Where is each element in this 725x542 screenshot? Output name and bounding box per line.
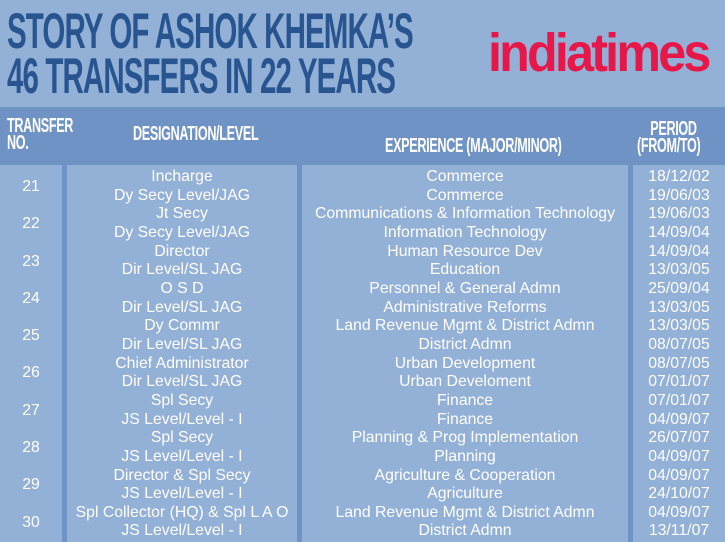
column: experience: Land Revenue Mgmt & District Admn xyxy=(335,504,594,521)
column: experience: Agriculture & Cooperation xyxy=(375,466,555,484)
column: experience: Planning xyxy=(434,448,496,465)
column: period: 25/09/04 xyxy=(648,280,710,297)
column: period: 04/09/07 xyxy=(648,411,710,428)
column: designation: Dy Secy Level/JAG xyxy=(114,224,250,241)
column: experience: Communications & Information Technology xyxy=(315,205,615,222)
column: period: 08/07/05 xyxy=(648,355,710,372)
header: period xyxy=(637,118,700,157)
column: designation: Dir Level/SL JAG xyxy=(122,299,242,316)
column: transfer numbers: 24 xyxy=(22,290,40,307)
column: experience: District Admn xyxy=(418,522,512,539)
column: transfer numbers: 21 xyxy=(22,178,40,195)
column: period: 19/06/03 xyxy=(648,187,710,204)
header: transfer no xyxy=(7,115,73,154)
title: 46 TRANSFERS IN 22 YEARS xyxy=(7,48,395,104)
logo: indiatimes: indiatimes xyxy=(488,23,708,83)
column: experience: Urban Develoment xyxy=(399,373,531,390)
column: period: 07/01/07 xyxy=(648,392,710,409)
column: designation: Dy Commr xyxy=(144,317,220,334)
column: period: 13/03/05 xyxy=(648,317,710,334)
column: experience: Urban Development xyxy=(395,355,535,372)
header: period: PERIOD xyxy=(650,118,697,140)
column: transfer numbers: 25 xyxy=(22,327,40,344)
column: period: 18/12/02 xyxy=(648,168,710,185)
column: period: 04/09/07 xyxy=(648,504,710,521)
column: transfer numbers: 28 xyxy=(22,439,40,456)
column: designation: JS Level/Level - I xyxy=(121,448,243,465)
column: designation: Chief Administrator xyxy=(115,355,249,372)
column: experience: Land Revenue Mgmt & District Admn xyxy=(335,317,594,334)
column: experience: Education xyxy=(430,261,500,278)
column: transfer numbers: 22 xyxy=(22,215,40,232)
column: experience: District Admn xyxy=(418,336,512,353)
column: period: 24/10/07 xyxy=(648,485,710,502)
column: transfer numbers: 30 xyxy=(22,514,40,531)
column: designation: Director xyxy=(154,243,210,260)
column: period xyxy=(648,168,710,539)
column: period: 19/06/03 xyxy=(648,205,710,222)
column: transfer numbers: 23 xyxy=(22,253,40,270)
column: period: 13/03/05 xyxy=(648,261,710,278)
header: experience: EXPERIENCE (MAJOR/MINOR) xyxy=(385,135,562,157)
column: experience: Planning & Prog Implementation xyxy=(352,429,578,446)
column: transfer numbers xyxy=(22,178,40,531)
column: period: 07/01/07 xyxy=(648,373,710,390)
column: designation: Dir Level/SL JAG xyxy=(122,336,242,353)
header: transfer no: TRANSFER xyxy=(7,115,73,137)
column: designation: JS Level/Level - I xyxy=(121,485,243,502)
column: transfer numbers: 29 xyxy=(22,476,40,493)
column: experience: Human Resource Dev xyxy=(387,243,543,260)
column: designation: Spl Collector (HQ) & Spl L A O xyxy=(76,504,288,521)
column: designation: JS Level/Level - I xyxy=(121,522,243,539)
column: designation: Spl Secy xyxy=(151,429,213,446)
column: period: 14/09/04 xyxy=(648,224,710,241)
column: experience: Finance xyxy=(437,392,493,409)
column: experience: Personnel & General Admn xyxy=(369,280,561,297)
column: designation: Dy Secy Level/JAG xyxy=(114,187,250,204)
column: period: 04/09/07 xyxy=(648,448,710,465)
column: designation: Director & Spl Secy xyxy=(114,466,250,484)
column: period: 13/03/05 xyxy=(648,299,710,316)
column: experience: Agriculture xyxy=(427,485,503,502)
column: period: 14/09/04 xyxy=(648,243,710,260)
column: designation: Dir Level/SL JAG xyxy=(122,261,242,278)
header: period: (FROM/TO) xyxy=(637,135,700,157)
column: transfer numbers: 27 xyxy=(22,402,40,419)
column: experience: Commerce xyxy=(426,187,504,204)
title: STORY OF ASHOK KHEMKA’S xyxy=(7,3,413,59)
column: period: 13/11/07 xyxy=(649,522,709,539)
header: designation: DESIGNATION/LEVEL xyxy=(133,123,258,145)
column: experience: Finance xyxy=(437,411,493,428)
column: period: 08/07/05 xyxy=(648,336,710,353)
column: designation: O S D xyxy=(160,280,204,297)
column: designation xyxy=(76,168,288,539)
column: period: 26/07/07 xyxy=(648,429,710,446)
column: experience xyxy=(315,168,615,539)
column: designation: Dir Level/SL JAG xyxy=(122,373,242,390)
column: designation: JS Level/Level - I xyxy=(121,411,243,428)
column: experience: Commerce xyxy=(426,168,504,185)
column: designation: Spl Secy xyxy=(151,392,213,409)
column: experience: Information Technology xyxy=(383,224,547,241)
column: experience: Administrative Reforms xyxy=(383,299,547,316)
header: transfer no: NO. xyxy=(7,132,28,154)
title xyxy=(7,3,413,104)
column: transfer numbers: 26 xyxy=(22,364,40,381)
column: designation: Incharge xyxy=(151,168,213,185)
column: period: 04/09/07 xyxy=(648,466,710,484)
column: designation: Jt Secy xyxy=(156,205,208,222)
header band xyxy=(0,107,725,165)
